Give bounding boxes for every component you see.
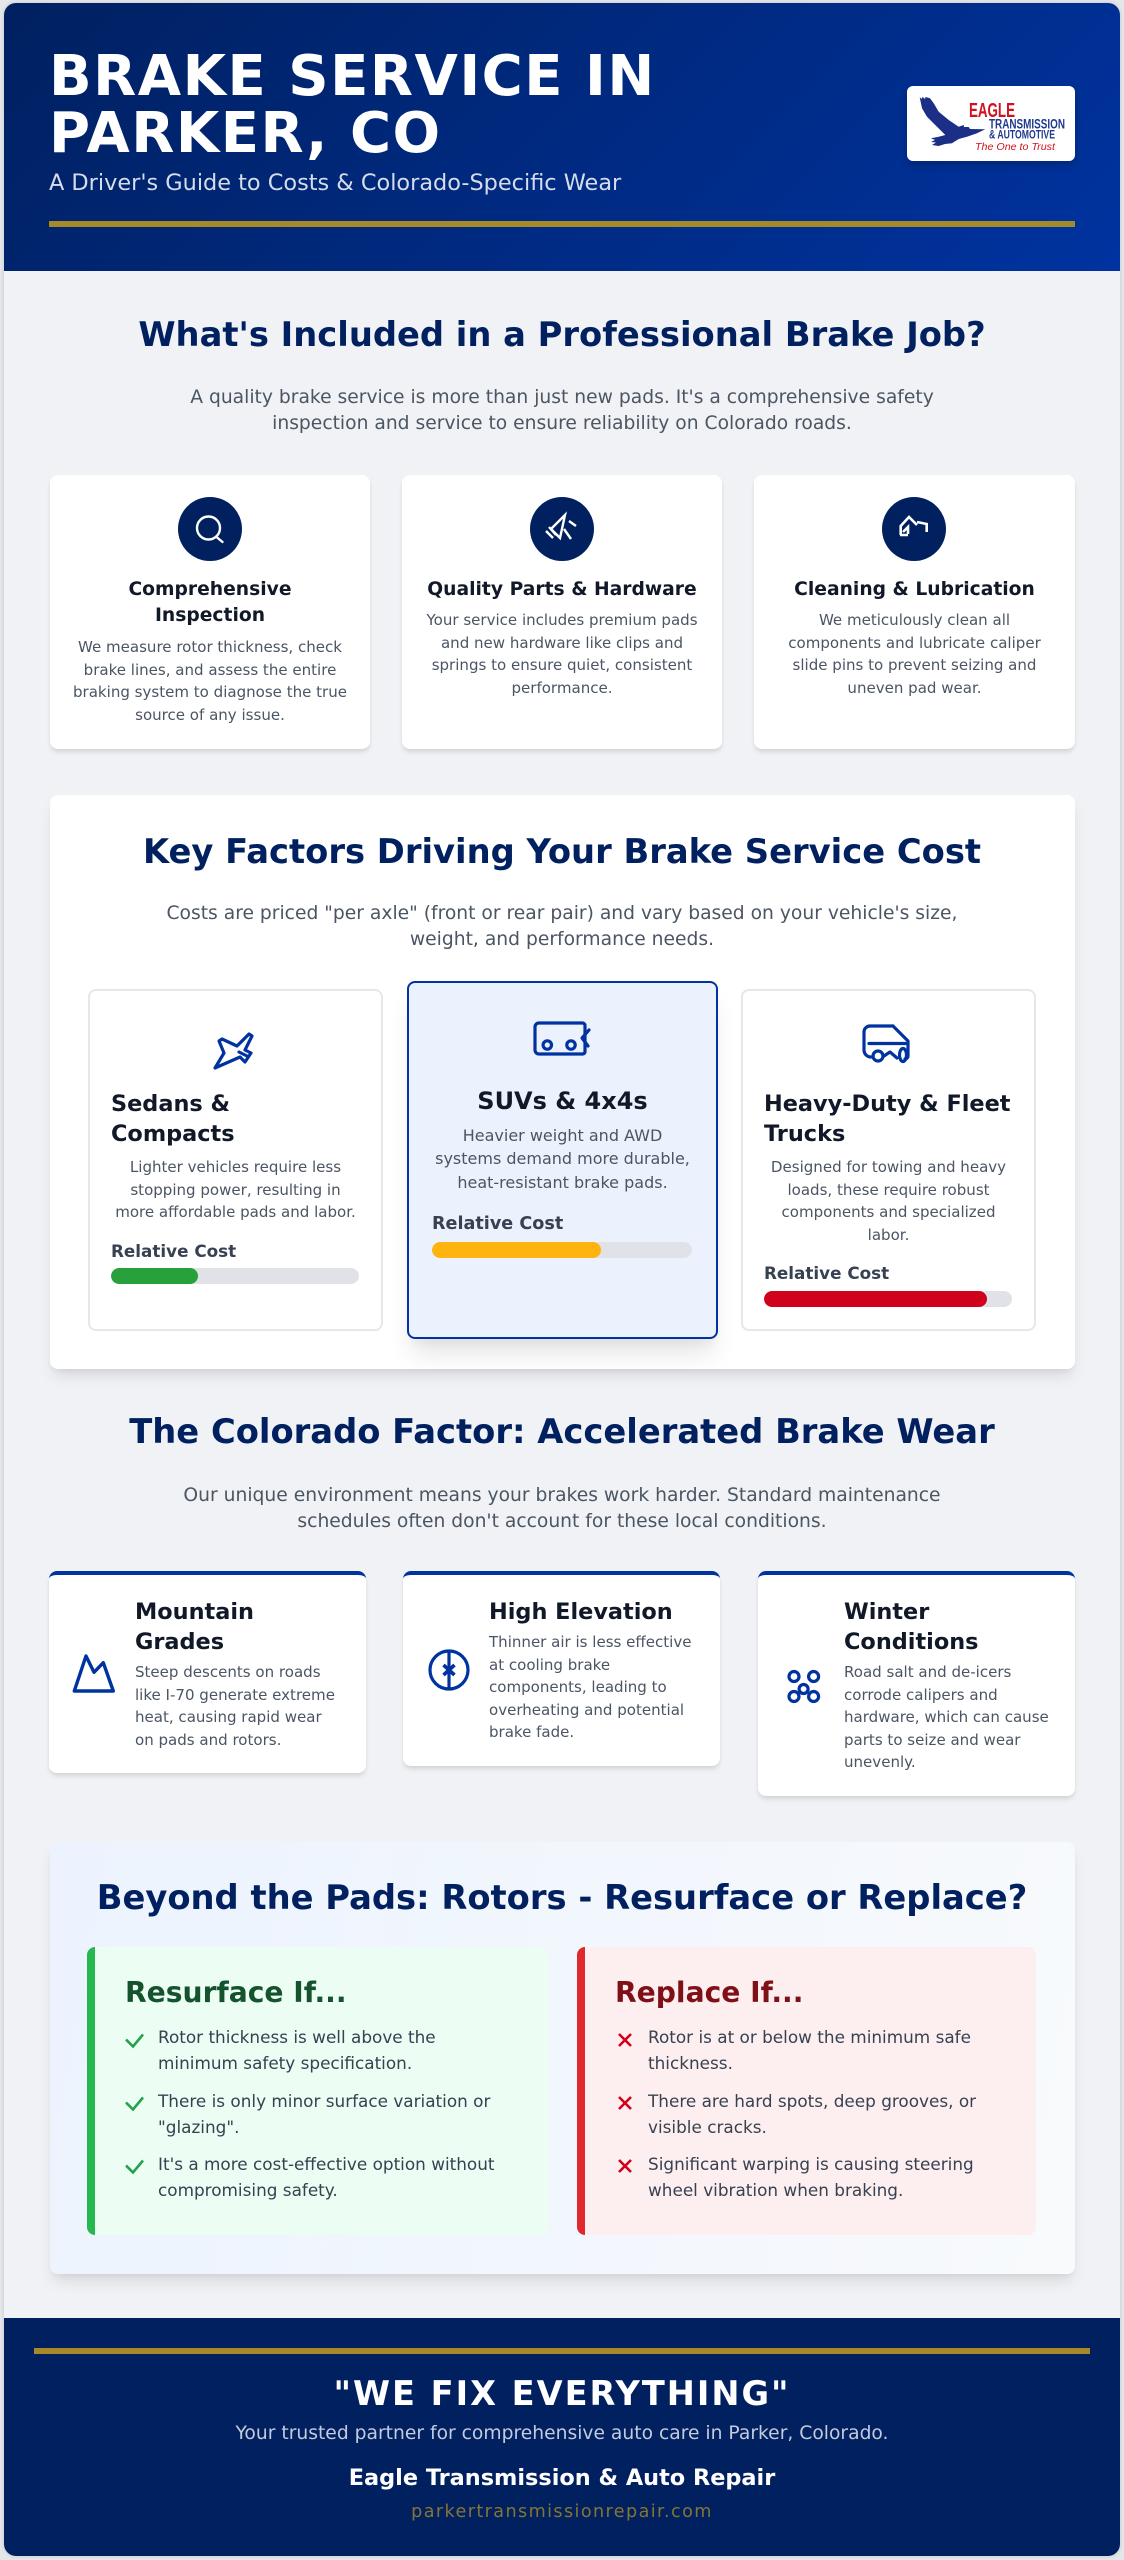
box title: Replace If...	[615, 1976, 803, 2009]
cost label: Relative Cost	[111, 1241, 236, 1261]
card title: Conditions	[844, 1629, 978, 1655]
card title: Quality Parts & Hardware	[427, 579, 697, 600]
card text: parts to seize and wear	[844, 1730, 1020, 1748]
card text: hardware, which can cause	[844, 1708, 1049, 1726]
card title: Comprehensive	[128, 579, 292, 600]
box: replace	[577, 1947, 1036, 2235]
item	[618, 2027, 971, 2073]
icon: SUV	[533, 1021, 591, 1056]
card text: braking system to diagnose the true	[73, 683, 347, 701]
logo: EAGLE	[969, 99, 1015, 122]
item: compromising safety.	[158, 2180, 338, 2200]
cost bar: 65 percent	[432, 1242, 692, 1258]
section heading: colorado factor: The Colorado Factor: Accelerated Brake Wear	[129, 1412, 995, 1451]
card text: unevenly.	[844, 1753, 916, 1771]
card text: at cooling brake	[489, 1656, 610, 1674]
tier text: loads, these require robust	[787, 1180, 990, 1198]
item: It's a more cost-effective option without	[158, 2154, 495, 2174]
company name: Eagle Transmission & Auto Repair	[349, 2465, 775, 2491]
tier text: Lighter vehicles require less	[130, 1158, 341, 1176]
section intro: colorado factor: Our unique environment means your brakes work harder. Standard maintenance	[183, 1485, 941, 1506]
card text	[488, 1633, 691, 1741]
section intro: cost factors	[166, 903, 958, 950]
card title: Mountain	[135, 1599, 254, 1625]
card text: brake fade.	[489, 1723, 574, 1741]
section intro: cost factors: Costs are priced "per axle" (front or rear pair) and vary based on your vehicle's size,	[166, 903, 958, 924]
section heading: rotors: Beyond the Pads: Rotors - Resurface or Replace?	[97, 1878, 1027, 1917]
tier text: systems demand more durable,	[435, 1149, 690, 1168]
tier title: Trucks	[764, 1121, 845, 1147]
card text: corrode calipers and	[844, 1686, 998, 1704]
tier text: Designed for towing and heavy	[771, 1158, 1006, 1176]
cost label: Relative Cost	[764, 1263, 889, 1283]
card text: We meticulously clean all	[819, 611, 1010, 629]
item: There is only minor surface variation or	[158, 2091, 490, 2111]
card title	[135, 1599, 254, 1655]
card title: Grades	[135, 1629, 224, 1655]
card text: like I-70 generate extreme	[135, 1686, 335, 1704]
cost label: Relative Cost	[432, 1214, 563, 1234]
card text: heat, causing rapid wear	[135, 1708, 322, 1726]
icon: elevation	[428, 1649, 470, 1691]
card: quality parts	[402, 475, 722, 749]
tier title	[764, 1091, 1011, 1147]
item: thickness.	[648, 2053, 733, 2073]
card text: components and lubricate caliper	[788, 634, 1041, 652]
icon: parts	[530, 497, 594, 561]
tier text: stopping power, resulting in	[130, 1180, 341, 1198]
header banner	[4, 3, 1120, 271]
item: minimum safety specification.	[158, 2053, 412, 2073]
cost bar: 90 percent	[764, 1291, 1012, 1306]
tier title: SUVs & 4x4s	[477, 1087, 648, 1115]
card text: Road salt and de-icers	[844, 1663, 1011, 1681]
gold divider	[49, 221, 1075, 227]
card: winter conditions	[758, 1571, 1075, 1796]
tier title	[111, 1091, 235, 1147]
gold divider	[34, 2348, 1090, 2354]
item: wheel vibration when braking.	[648, 2180, 903, 2200]
icon: magnifier	[178, 497, 242, 561]
card text: source of any issue.	[135, 706, 285, 724]
card title	[844, 1599, 978, 1655]
section intro: colorado factor: schedules often don't account for these local conditions.	[297, 1511, 827, 1532]
card text	[844, 1663, 1049, 1771]
card title: Winter	[844, 1599, 929, 1625]
cost bar: 35 percent	[111, 1268, 359, 1284]
card text: components, leading to	[489, 1678, 667, 1696]
card text: Your service includes premium pads	[426, 611, 698, 629]
icon: road salt	[787, 1670, 820, 1704]
item: visible cracks.	[648, 2117, 767, 2137]
card text: Steep descents on roads	[135, 1663, 321, 1681]
icon: truck	[862, 1024, 910, 1064]
tier card: SUVs	[407, 981, 718, 1339]
item	[618, 2091, 976, 2137]
section heading: cost factors: Key Factors Driving Your Brake Service Cost	[143, 832, 981, 871]
item	[125, 2027, 436, 2073]
card: cleaning	[754, 475, 1075, 749]
card text	[135, 1663, 335, 1748]
card title: High Elevation	[489, 1599, 673, 1625]
tagline: Your trusted partner for comprehensive auto care in Parker, Colorado.	[235, 2423, 888, 2444]
title	[49, 44, 656, 166]
tier text: heat-resistant brake pads.	[457, 1173, 668, 1192]
card text: slide pins to prevent seizing and	[793, 656, 1036, 674]
card: mountain grades	[49, 1571, 366, 1773]
title: BRAKE SERVICE IN	[49, 44, 656, 109]
section intro: what's included: inspection and service to ensure reliability on Colorado roads.	[272, 413, 852, 434]
card text: uneven pad wear.	[847, 678, 982, 696]
panel: rotors	[50, 1842, 1075, 2274]
section intro: cost factors: weight, and performance needs.	[410, 929, 714, 950]
box: resurface	[87, 1947, 548, 2235]
item: Significant warping is causing steering	[648, 2154, 974, 2174]
card text	[73, 638, 347, 724]
tier text	[771, 1158, 1006, 1244]
card text: springs to ensure quiet, consistent	[432, 656, 692, 674]
card text: performance.	[511, 678, 613, 696]
title: PARKER, CO	[49, 100, 442, 166]
tier card: trucks	[741, 989, 1036, 1331]
item	[125, 2154, 495, 2200]
icon: cleaning	[882, 497, 946, 561]
tier card: sedans	[88, 989, 383, 1331]
card: comprehensive inspection	[50, 475, 370, 749]
card: high elevation	[403, 1571, 720, 1766]
card text: Thinner air is less effective	[489, 1633, 691, 1651]
card text	[788, 611, 1041, 696]
section intro: colorado factor	[183, 1485, 941, 1532]
logo	[907, 86, 1075, 161]
logo: & AUTOMOTIVE	[989, 130, 1055, 142]
tier title: Sedans &	[111, 1091, 230, 1117]
tier title: Heavy-Duty & Fleet	[764, 1091, 1011, 1117]
card title	[128, 579, 292, 626]
tier text	[115, 1158, 356, 1221]
section intro: what's included	[190, 387, 934, 434]
icon: mountain	[72, 1654, 115, 1693]
card text	[426, 611, 698, 696]
item: Rotor thickness is well above the	[158, 2027, 436, 2047]
panel: cost factors	[50, 795, 1075, 1369]
tier title: Compacts	[111, 1121, 235, 1147]
item: There are hard spots, deep grooves, or	[648, 2091, 976, 2111]
item	[125, 2091, 490, 2137]
item	[618, 2154, 974, 2200]
section heading: what's included: What's Included in a Professional Brake Job?	[138, 315, 986, 354]
card title: Cleaning & Lubrication	[794, 579, 1035, 600]
item: Rotor is at or below the minimum safe	[648, 2027, 971, 2047]
card text: on pads and rotors.	[135, 1730, 281, 1748]
box title: Resurface If...	[125, 1976, 347, 2009]
subtitle: A Driver's Guide to Costs & Colorado-Specific Wear	[49, 170, 621, 196]
tier text: more affordable pads and labor.	[115, 1203, 356, 1221]
footer	[4, 2318, 1120, 2556]
logo: TRANSMISSION	[989, 116, 1065, 132]
logo: The One to Trust	[975, 142, 1056, 153]
tier text: Heavier weight and AWD	[463, 1126, 662, 1145]
tier text: components and specialized	[781, 1203, 996, 1221]
tier text	[435, 1126, 690, 1192]
card text: We measure rotor thickness, check	[78, 638, 342, 656]
card text: brake lines, and assess the entire	[84, 660, 336, 678]
section intro: what's included: A quality brake service is more than just new pads. It's a comprehensive safety	[190, 387, 934, 408]
card title: Inspection	[155, 605, 265, 626]
item: "glazing".	[158, 2117, 239, 2137]
website: parkertransmissionrepair.com	[411, 2502, 713, 2522]
icon: sedan	[213, 1032, 254, 1070]
slogan: "WE FIX EVERYTHING"	[333, 2374, 791, 2413]
tier text: labor.	[868, 1226, 909, 1244]
card text: overheating and potential	[489, 1700, 684, 1718]
card text: and new hardware like clips and	[441, 634, 683, 652]
